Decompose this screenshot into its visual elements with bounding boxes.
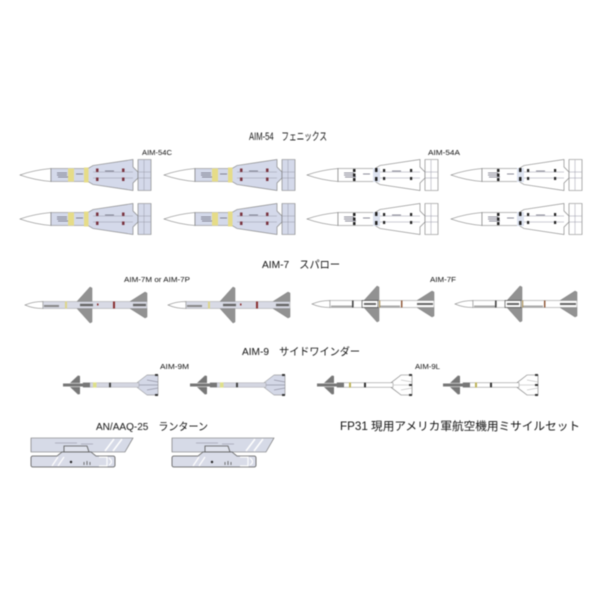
missile group: AIM-7F	[312, 286, 577, 322]
label: AIM-54A: AIM-54A	[428, 150, 460, 157]
targeting pods: AN/AAQ-25	[31, 438, 274, 467]
missile group: AIM-54C	[20, 160, 295, 234]
product title: FP31: FP31 現用アメリカ軍航空機用ミサイルセット	[340, 419, 580, 433]
missile group: AIM-9L	[317, 374, 538, 396]
missile group: AIM-9M	[63, 374, 285, 396]
heading: AIM-7 Sparrow: AIM-7 スパロー	[262, 259, 340, 271]
heading: AIM-54 Phoenix: AIM-54 フェニックス	[249, 130, 327, 143]
label: AIM-9L: AIM-9L	[415, 364, 440, 371]
heading: AIM-9 Sidewinder: AIM-9 サイドワインダー	[242, 345, 360, 358]
label: AIM-7F: AIM-7F	[430, 277, 456, 284]
heading: AN/AAQ-25 Lantern: AN/AAQ-25 ランターン	[96, 421, 208, 433]
label: AIM-54C: AIM-54C	[142, 150, 172, 157]
missile group: AIM-54A	[307, 160, 582, 234]
missile group: AIM-7M/P	[25, 287, 290, 323]
label: AIM-9M: AIM-9M	[160, 364, 189, 371]
label: AIM-7M or AIM-7P: AIM-7M or AIM-7P	[124, 277, 190, 284]
